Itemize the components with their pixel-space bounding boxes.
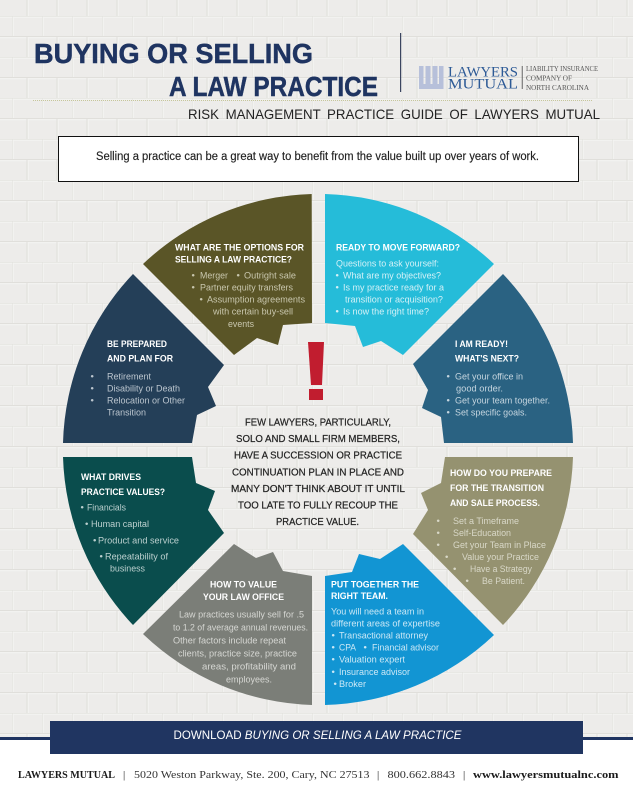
logo tagline: LIABILITY INSURANCE [526, 64, 598, 73]
list: questions: Is my practice ready for a [343, 282, 445, 294]
list: options: Assumption agreements [207, 294, 305, 306]
list: preparation: • [445, 552, 448, 563]
heading: options: WHAT ARE THE OPTIONS FOR [175, 242, 304, 254]
list: team members: Broker [339, 679, 367, 690]
list: team members: Transactional attorney [339, 630, 428, 642]
list: preparation: • [466, 576, 469, 587]
heading: be prepared [107, 339, 173, 364]
heading: prepare: FOR THE TRANSITION [450, 483, 544, 494]
list: next steps: Get your team together. [455, 396, 550, 406]
list: team members [331, 606, 440, 690]
list: preparation: Get your Team in Place [453, 540, 546, 551]
paragraph: valuation: Other factors include repeat [173, 636, 286, 646]
footer contact line: 800.662.8843 [388, 769, 456, 781]
heading: value office [203, 580, 285, 603]
list: questions: • [336, 282, 339, 294]
list: next steps: • [446, 408, 450, 418]
footer contact line: 5020 Weston Parkway, Ste. 200, Cary, NC 27513 [134, 769, 370, 781]
list: team members: • [332, 642, 335, 654]
heading: practice values [81, 472, 165, 498]
center text: SOLO AND SMALL FIRM MEMBERS, [236, 434, 400, 445]
logo tagline: NORTH CAROLINA [526, 83, 590, 92]
logo wordmark: MUTUAL [448, 76, 518, 92]
heading: I am ready [455, 339, 519, 364]
center text: MANY DON'T THINK ABOUT IT UNTIL [231, 484, 405, 495]
download banner: DOWNLOAD BUYING OR SELLING A LAW PRACTICE [174, 730, 462, 742]
list: questions: • [336, 270, 339, 282]
list: options: Partner equity transfers [200, 282, 293, 294]
paragraph: valuation: employees. [226, 674, 272, 686]
heading: prepare [450, 468, 553, 509]
list: plan for: • [90, 396, 94, 406]
list: next steps: Set specific goals. [455, 408, 527, 418]
heading: ready: READY TO MOVE FORWARD? [336, 242, 460, 254]
download banner [50, 721, 583, 754]
logo wordmark: LAWYERS [448, 64, 518, 80]
paragraph: valuation: Law practices usually sell for .5 [179, 610, 304, 620]
heading: I am ready: WHAT'S NEXT? [455, 354, 519, 364]
heading: practice values: WHAT DRIVES [81, 472, 142, 483]
list: options: • [192, 282, 195, 294]
list: value drivers: Repeatability of [105, 552, 168, 562]
footer contact line [18, 769, 618, 781]
panel: what drives practice values [63, 457, 224, 625]
panel: put together the right team [325, 544, 494, 705]
panel: I am ready [413, 274, 573, 443]
list: team members: different areas of expertise [331, 618, 440, 630]
logo tagline [526, 64, 598, 92]
list: value drivers: • [80, 502, 84, 514]
center text: TOO LATE TO FULLY RECOUP THE [238, 500, 398, 512]
heading: team: RIGHT TEAM. [331, 591, 388, 602]
list: questions: Is now the right time? [343, 306, 429, 318]
list: value drivers: • [100, 552, 103, 562]
header divider [400, 33, 401, 92]
segment shape: dark teal [63, 457, 224, 625]
list: team members: • [334, 679, 337, 690]
list: team members: CPA [339, 642, 357, 654]
panel: ready to move forward [325, 194, 494, 355]
list: plan for: • [90, 384, 94, 394]
list: next steps: good order. [456, 384, 503, 394]
logo wordmark [448, 64, 518, 92]
list: value drivers [80, 502, 179, 574]
list: options [192, 270, 305, 330]
heading: value office: HOW TO VALUE [210, 580, 278, 590]
list: options: Outright sale [244, 270, 296, 282]
list: team members: • [332, 630, 335, 642]
segment shape: steel blue [413, 274, 573, 443]
heading: team [331, 580, 420, 602]
list: preparation: Be Patient. [482, 576, 525, 587]
icon: exclamation mark [308, 342, 324, 400]
list: options: Merger [200, 270, 229, 282]
heading: prepare: AND SALE PROCESS. [450, 498, 540, 509]
list: questions: transition or acquisition? [345, 294, 443, 306]
list: preparation: Value your Practice [462, 552, 539, 563]
subtitle: RISK MANAGEMENT PRACTICE GUIDE OF LAWYERS MUTUAL [188, 107, 600, 122]
list: plan for: • [90, 372, 94, 382]
panel: how to value your law office [143, 544, 312, 705]
heading: options: SELLING A LAW PRACTICE? [175, 254, 292, 266]
list: next steps: • [446, 372, 450, 382]
list: next steps [446, 372, 550, 418]
center text [231, 418, 405, 528]
list: options: with certain buy-sell [212, 306, 293, 318]
list: questions: What are my objectives? [343, 270, 441, 282]
segment shape: cyan [325, 194, 494, 355]
list: preparation: Set a Timeframe [453, 516, 519, 527]
heading: be prepared: AND PLAN FOR [107, 354, 173, 364]
list: value drivers: • [93, 536, 96, 546]
paragraph: valuation: areas, profitability and [202, 662, 296, 672]
segment shape: navy [63, 274, 224, 443]
list: plan for: Disability or Death [107, 384, 180, 394]
list: team members: Valuation expert [339, 654, 405, 666]
list: value drivers: business [110, 564, 145, 574]
title [34, 38, 378, 102]
center text: FEW LAWYERS, PARTICULARLY, [245, 418, 391, 428]
heading: team: PUT TOGETHER THE [331, 580, 420, 590]
list: preparation: Self-Education [453, 528, 511, 539]
list: plan for: Transition [107, 408, 146, 418]
segment shape: bright blue [325, 544, 494, 705]
segment shape: gray [143, 544, 312, 705]
paragraph: valuation [173, 610, 308, 686]
footer background [0, 737, 633, 800]
footer contact line: | [123, 769, 125, 781]
intro box [58, 136, 578, 182]
segment shape: olive [143, 194, 312, 355]
list: preparation [436, 516, 546, 587]
list: preparation: • [436, 516, 440, 527]
list: value drivers: Financials [87, 502, 126, 514]
list: options: • [200, 294, 203, 306]
list: preparation: Have a Strategy [470, 564, 532, 575]
list: preparation: • [453, 564, 456, 575]
paragraph: valuation: clients, practice size, practice [178, 648, 297, 660]
list: value drivers: Human capital [91, 519, 149, 530]
heading: value office: YOUR LAW OFFICE [203, 592, 285, 603]
list: plan for: Relocation or Other [107, 396, 186, 406]
list: questions [336, 258, 445, 318]
title: BUYING OR SELLING [34, 38, 313, 69]
panel: be prepared [63, 274, 224, 443]
logo: Lawyers Mutual [419, 64, 598, 92]
list: next steps: • [446, 396, 450, 406]
list: next steps: Get your office in [455, 372, 523, 382]
heading: prepare: HOW DO YOU PREPARE [450, 468, 553, 479]
paragraph: valuation: to 1.2 of average annual revenues. [173, 622, 308, 634]
list: preparation: • [436, 528, 440, 539]
logo tagline: COMPANY OF [526, 74, 572, 82]
list: team members: You will need a team in [331, 606, 424, 618]
footer contact line: LAWYERS MUTUAL [18, 769, 115, 781]
panel: how do you prepare [413, 457, 573, 625]
center text: HAVE A SUCCESSION OR PRACTICE [234, 450, 402, 462]
segment shape: khaki [413, 457, 573, 625]
list: plan for [90, 372, 186, 418]
heading: practice values: PRACTICE VALUES? [81, 487, 165, 498]
panel: options for selling [143, 194, 312, 355]
footer contact line: | [377, 769, 379, 781]
list: questions: Questions to ask yourself: [336, 258, 439, 270]
list: team members: Financial advisor [372, 642, 440, 654]
center text: CONTINUATION PLAN IN PLACE AND [232, 468, 404, 478]
list: team members: • [364, 642, 367, 654]
title: A LAW PRACTICE [169, 71, 378, 102]
list: team members: • [332, 654, 335, 666]
list: options: • [192, 270, 195, 282]
icon: columns [419, 66, 444, 89]
heading: options [175, 242, 304, 266]
list: value drivers: • [85, 519, 88, 530]
list: options: • [236, 270, 240, 282]
list: questions: • [336, 306, 339, 318]
list: value drivers: Product and service [98, 536, 179, 546]
footer contact line: www.lawyersmutualnc.com [473, 769, 618, 781]
center text: PRACTICE VALUE. [276, 517, 359, 528]
heading: I am ready: I AM READY! [455, 339, 508, 350]
footer contact line: | [463, 769, 465, 781]
list: preparation: • [436, 540, 440, 551]
list: plan for: Retirement [107, 372, 151, 382]
list: options: events [228, 319, 254, 330]
list: team members: Insurance advisor [339, 667, 411, 678]
list: team members: • [332, 667, 335, 678]
heading: be prepared: BE PREPARED [107, 339, 167, 350]
intro box: Selling a practice can be a great way to benefit from the value built up over years of work. [96, 151, 539, 163]
